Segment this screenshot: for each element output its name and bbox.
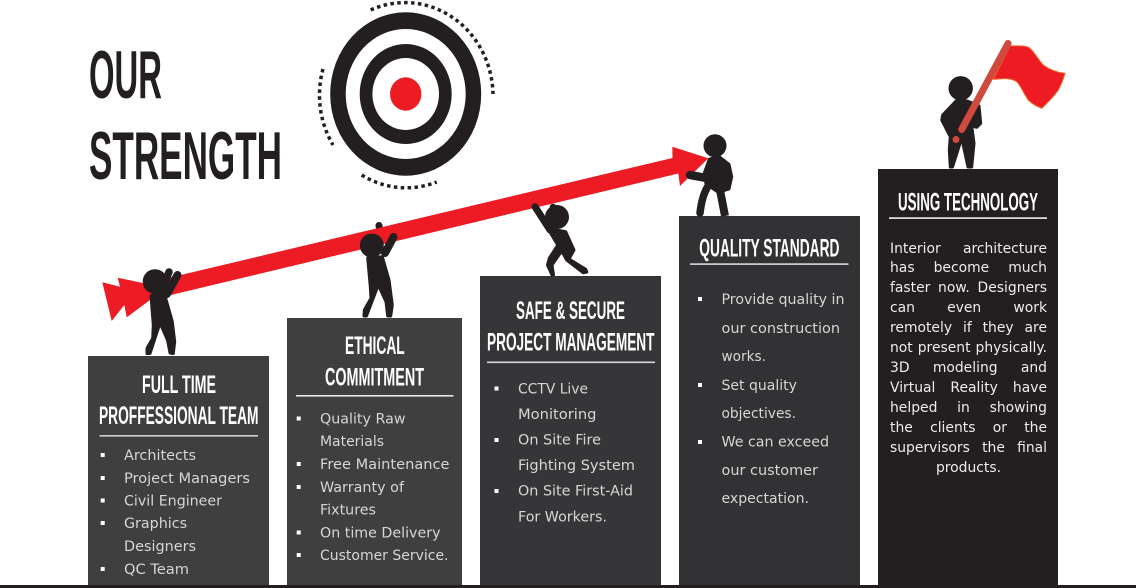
text block: using technology paragraph: the clients or the — [890, 420, 1047, 436]
panel: quality standard: our construction — [722, 321, 840, 337]
panel: safe and secure project management: CCTV Live — [518, 381, 588, 397]
panel: safe and secure project management: Fighting System — [518, 458, 635, 474]
panel: safe and secure project management — [480, 276, 661, 588]
text block: using technology paragraph: Virtual Reality have — [890, 380, 1047, 396]
title: our strength: STRENGTH — [89, 118, 282, 194]
panel: ethical commitment: Fixtures — [320, 502, 376, 518]
icon: target — [319, 3, 493, 188]
panel: quality standard: Set quality — [722, 378, 797, 394]
panel: full time professional team: Graphics — [124, 516, 187, 532]
panel: quality standard: QUALITY STANDARD — [699, 235, 840, 263]
panel: quality standard: works. — [722, 349, 766, 365]
figure: person holding flag — [942, 76, 981, 167]
panel: ethical commitment: Free Maintenance — [320, 457, 450, 473]
panel: ethical commitment: ETHICAL — [345, 332, 405, 360]
text block: using technology paragraph: products. — [936, 460, 1001, 476]
panel: ethical commitment: On time Delivery — [320, 526, 440, 542]
figure hand behind arrow — [379, 226, 381, 236]
panel: full time professional team: FULL TIME — [142, 371, 216, 399]
arrow: red rising arrow — [102, 147, 708, 321]
panel: full time professional team — [88, 356, 269, 588]
panel: ethical commitment: Quality Raw — [320, 412, 406, 428]
panel: quality standard: We can exceed — [722, 435, 829, 451]
text block: using technology paragraph: not present physically. — [890, 340, 1047, 356]
text block: using technology paragraph: remotely if they are — [890, 320, 1047, 336]
text block: using technology paragraph: can even work — [890, 300, 1047, 316]
panel: quality standard — [679, 216, 860, 588]
panel: quality standard: our customer — [722, 463, 818, 479]
panel: quality standard: objectives. — [722, 406, 796, 422]
panel: full time professional team: Project Managers — [124, 471, 250, 487]
panel: full time professional team: Designers — [124, 539, 196, 555]
text block: using technology paragraph: Interior architecture — [890, 240, 1047, 256]
panel: using technology — [878, 169, 1058, 588]
panel: safe and secure project management: On Site First-Aid — [518, 484, 633, 500]
title: our strength: OUR — [89, 37, 162, 113]
panel: safe and secure project management: For Workers. — [518, 510, 607, 526]
figure: person lifting arrow tail — [143, 269, 178, 354]
panel: safe and secure project management: On Site Fire — [518, 432, 601, 448]
text block: using technology paragraph: 3D modeling and — [890, 360, 1047, 376]
panel: safe and secure project management: Monitoring — [518, 407, 596, 423]
panel: full time professional team: Civil Engineer — [124, 494, 222, 510]
title: our strength — [89, 37, 282, 194]
panel: quality standard: expectation. — [722, 491, 809, 507]
panel: safe and secure project management: SAFE & SECURE — [516, 297, 625, 325]
figure: person climbing under arrow — [535, 205, 587, 275]
panel: full time professional team: Architects — [124, 448, 196, 464]
panel: ethical commitment — [287, 318, 462, 588]
text block: using technology paragraph: faster now. Designers — [890, 280, 1047, 296]
panel: full time professional team: PROFFESSIONAL TEAM — [99, 402, 258, 430]
text block: using technology paragraph: supervisors the final — [890, 440, 1047, 456]
panel: ethical commitment: Warranty of — [320, 480, 405, 496]
text block: using technology paragraph — [890, 240, 1047, 476]
panel: ethical commitment: Materials — [320, 434, 384, 450]
panel: safe and secure project management: PROJECT MANAGEMENT — [487, 329, 654, 357]
panel: ethical commitment: COMMITMENT — [325, 364, 424, 392]
panel: quality standard: Provide quality in — [722, 292, 844, 308]
panel: full time professional team: QC Team — [124, 562, 189, 578]
figure: person holding arrow head — [690, 134, 732, 216]
figure: person pushing arrow up — [360, 234, 394, 316]
icon: red flag — [952, 44, 1065, 143]
base line — [0, 585, 1136, 588]
panel: ethical commitment: Customer Service. — [320, 548, 448, 564]
text block: using technology paragraph: has become much — [890, 260, 1047, 276]
text block: using technology paragraph: helped in showing — [890, 400, 1047, 416]
